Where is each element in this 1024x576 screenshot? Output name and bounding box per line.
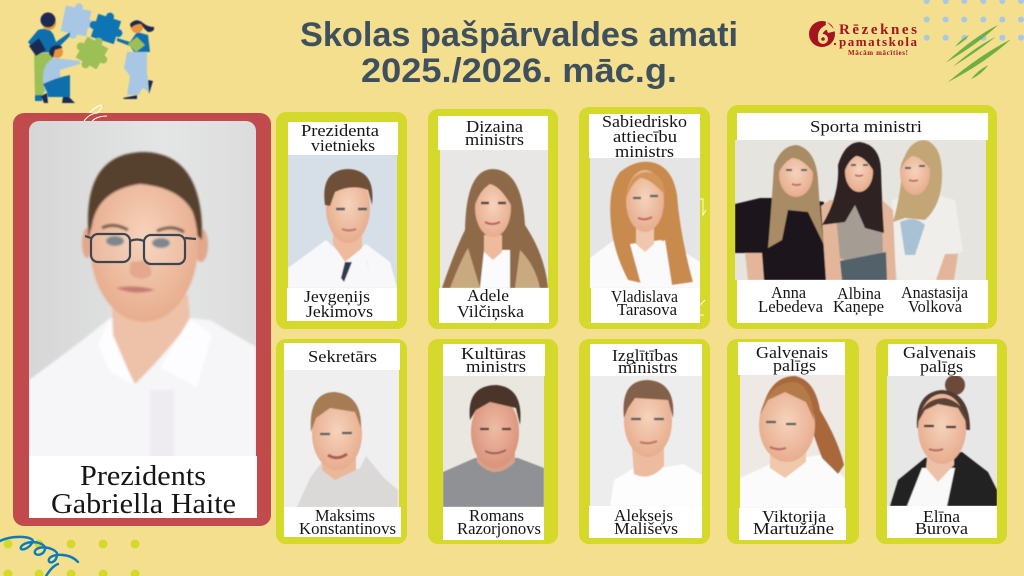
name box: [439, 288, 549, 323]
name text: Mališevs: [614, 519, 678, 538]
name: Anastasija Volkova: [901, 283, 968, 316]
name text: [753, 507, 834, 538]
doodle overlap: [84, 113, 107, 121]
name box: [739, 508, 846, 540]
name text: Vladislava: [611, 287, 678, 306]
name text: Maksims: [315, 506, 375, 525]
name text: Jevgeņijs: [304, 287, 370, 306]
panel: culture minister: [428, 339, 558, 544]
role text: Sporta ministri: [810, 117, 922, 136]
photo: Adele Vilčiņska: [440, 150, 548, 288]
role text: palīgs: [773, 356, 816, 375]
decorative white doodle above president panel: [84, 105, 107, 120]
logo motto: Mācām mācīties!: [848, 49, 908, 57]
role text: attiecību: [613, 127, 678, 146]
card background: [579, 339, 710, 544]
role text: Dizaina: [466, 117, 523, 136]
title line 2: 2025./2026. māc.g.: [361, 52, 677, 90]
photo: Romans Razorjonovs: [443, 376, 544, 507]
role box: [438, 116, 548, 150]
role box: [590, 344, 702, 376]
panel: design minister: [428, 109, 558, 329]
name: Anastasija Volkova: Anastasija: [901, 283, 968, 302]
photo: Gabriella Haite: [29, 121, 256, 460]
girl A: [735, 198, 826, 280]
illustration: team assembling puzzle: [28, 1, 154, 103]
name box: [737, 280, 988, 323]
logo emblem: [809, 20, 836, 47]
photo: Aleksejs Mališevs: [590, 376, 702, 506]
logo name line 2: pamatskola: [839, 34, 918, 49]
role text: [301, 121, 379, 155]
role text: ministrs: [465, 130, 524, 149]
panel: public relations minister: [579, 107, 710, 329]
name box: [284, 507, 401, 537]
photo: three sports ministers: [735, 140, 986, 280]
card background: [276, 112, 407, 329]
school logo: [809, 20, 918, 57]
panel background: [13, 113, 271, 526]
figure: standing man: [28, 12, 70, 101]
name: Anna Lebedeva: Anna: [771, 283, 806, 302]
decorative green dots bottom left: [4, 540, 140, 576]
decorative blue dots top right: [924, 0, 1024, 41]
name text: Adele: [467, 286, 509, 305]
name text: Elīna: [923, 507, 960, 526]
role text: Prezidenta: [301, 121, 379, 140]
girl C: [892, 192, 963, 280]
name: Anna Lebedeva: [758, 283, 823, 316]
panel: education minister: [579, 339, 710, 544]
title line 1: Skolas pašpārvaldes amati: [300, 16, 738, 54]
name text: [457, 506, 541, 538]
title: [300, 16, 738, 90]
puzzle piece: dark blue: [86, 8, 127, 46]
role text: [465, 117, 524, 149]
puzzle piece: green: [69, 30, 115, 76]
glasses: [85, 234, 196, 264]
photo: Viktorija Martužane: [740, 375, 845, 508]
name text: Martužane: [753, 519, 834, 538]
name box: [443, 507, 544, 540]
role box: [284, 343, 400, 370]
figure: kneeling man: [41, 45, 80, 103]
name text: [457, 286, 524, 321]
panel: secretary: [276, 339, 407, 544]
name text: Tarasova: [617, 300, 677, 319]
role box: [888, 344, 997, 376]
girl B: [821, 200, 896, 280]
panel: chief assistant 1: [727, 339, 859, 544]
panel: chief assistant 2: [876, 339, 1007, 544]
role text: palīgs: [920, 357, 963, 376]
name box: [589, 506, 702, 538]
role text: [602, 112, 687, 161]
name: Anastasija Volkova: Volkova: [908, 297, 962, 316]
decorative green brush strokes: [946, 25, 1011, 82]
role box: [443, 344, 545, 376]
name box: [887, 506, 997, 538]
president role: Prezidents: [80, 461, 206, 492]
name text: Konstantinovs: [299, 519, 396, 538]
card background: [428, 109, 558, 329]
card background: [727, 339, 859, 544]
role box: [738, 342, 845, 375]
role text: ministrs: [618, 358, 677, 377]
role text: Sabiedrisko: [602, 112, 687, 131]
role text: vietnieks: [311, 136, 375, 155]
photo: Jevgeņijs Jekimovs: [288, 155, 397, 288]
photo: Maksims Konstantinovs: [284, 370, 399, 507]
name: Anna Lebedeva: Lebedeva: [758, 297, 823, 316]
name text: [915, 507, 968, 538]
name: Albina Kaņepe: Albina: [837, 284, 881, 303]
puzzle piece: light blue: [60, 1, 97, 42]
panel: sports ministers: [727, 105, 997, 329]
role text: [903, 343, 976, 376]
decorative white doodles beside card: [700, 199, 706, 315]
role text: Sekretārs: [308, 347, 377, 366]
logo name line 1: Rēzeknes: [839, 22, 917, 38]
card background: [579, 107, 710, 329]
panel: president: [13, 113, 271, 526]
name text: Aleksejs: [614, 506, 673, 525]
name box: [287, 288, 397, 321]
name box: [591, 288, 700, 323]
card background: [727, 105, 997, 329]
role text: ministrs: [466, 357, 526, 376]
president name: Gabriella Haite: [51, 489, 236, 520]
role text: Izglītības: [612, 346, 678, 365]
role text: [756, 343, 828, 375]
role text: [461, 344, 526, 376]
name text: Vilčiņska: [457, 302, 524, 321]
panel: vice president: [276, 112, 407, 329]
role text: Kultūras: [461, 344, 526, 363]
caption box: [29, 456, 257, 518]
card background: [876, 339, 1007, 544]
photo: Vladislava Tarasova: [590, 158, 700, 288]
name text: [614, 506, 678, 538]
role text: [612, 346, 678, 377]
name text: Razorjonovs: [457, 519, 541, 538]
name text: [299, 506, 396, 538]
name text: Viktorija: [762, 507, 826, 526]
role text: Galvenais: [756, 343, 828, 362]
name text: Romans: [469, 506, 524, 525]
photo: Elīna Burova: [887, 375, 997, 506]
role box: [589, 114, 700, 158]
name: Albina Kaņepe: Kaņepe: [833, 297, 884, 316]
name text: Burova: [915, 519, 968, 538]
card background: [428, 339, 558, 544]
figure: woman with folder: [117, 20, 154, 99]
role box: [737, 113, 988, 140]
name text: [304, 287, 373, 321]
decorative blue squiggle: [0, 537, 78, 576]
name text: [611, 287, 678, 319]
name text: Jekimovs: [306, 302, 373, 321]
role text: ministrs: [615, 142, 674, 161]
name: Albina Kaņepe: [833, 284, 884, 316]
role text: Galvenais: [903, 343, 976, 362]
role box: [288, 122, 398, 155]
card background: [276, 339, 407, 544]
